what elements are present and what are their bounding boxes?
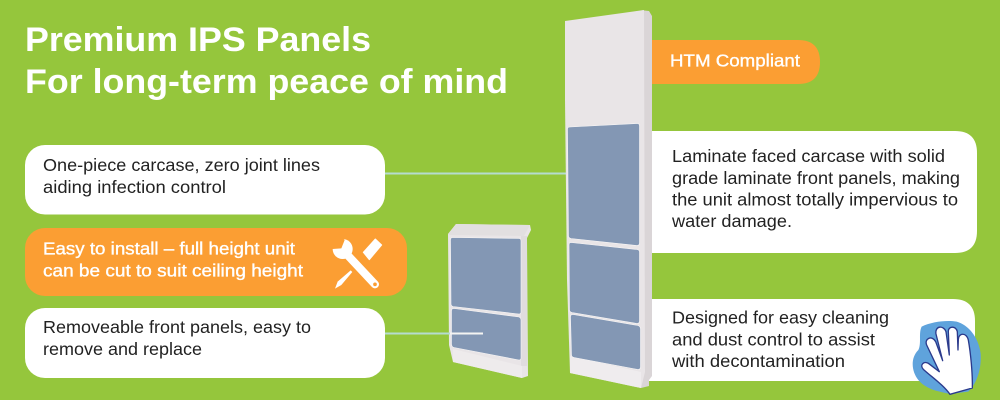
callout: easy to install: can be cut to suit ceiling height xyxy=(43,260,303,280)
title: Premium IPS Panels xyxy=(25,21,371,59)
callout: one-piece carcase: aiding infection control xyxy=(43,177,226,197)
title xyxy=(25,21,508,101)
callout: one-piece carcase: One-piece carcase, zero joint lines xyxy=(43,155,320,175)
callout: laminate faced carcase: the unit almost totally impervious to xyxy=(672,190,958,210)
callout: laminate faced carcase xyxy=(650,131,977,253)
callout: easy cleaning: and dust control to assist xyxy=(672,330,875,350)
callout: one-piece carcase xyxy=(25,145,385,214)
title: For long-term peace of mind xyxy=(25,63,508,101)
callout: removeable front panels: Removeable front panels, easy to xyxy=(43,317,311,337)
callout: HTM compliant xyxy=(650,40,820,84)
callout: easy to install: Easy to install – full height unit xyxy=(43,238,295,258)
icon: cleaning hand on blue cloth xyxy=(913,321,981,394)
callout: easy cleaning xyxy=(648,299,975,381)
callout: laminate faced carcase: Laminate faced carcase with solid xyxy=(672,146,945,166)
connector: carcase callout to tall unit xyxy=(385,172,566,174)
panel: small unit lower xyxy=(452,308,521,360)
callout: laminate faced carcase: grade laminate front panels, making xyxy=(672,168,960,188)
icon: wrench and screwdriver xyxy=(328,234,382,289)
panel: tall unit upper xyxy=(568,124,640,246)
product: small wall unit xyxy=(448,224,531,378)
connector: removeable panels callout to small unit xyxy=(385,332,483,334)
callout: laminate faced carcase: water damage. xyxy=(671,211,792,231)
product: tall full-height unit xyxy=(565,10,652,388)
panel: small unit upper xyxy=(450,238,521,314)
callout: easy to install xyxy=(25,228,407,296)
panel: tall unit middle xyxy=(569,242,640,324)
panel: tall unit lower xyxy=(570,314,640,370)
callout: HTM compliant: HTM Compliant xyxy=(670,50,800,70)
callout: easy cleaning: Designed for easy cleaning xyxy=(672,308,889,328)
callout: easy cleaning: with decontamination xyxy=(671,351,845,371)
callout: removeable front panels xyxy=(25,308,385,378)
callout: removeable front panels: remove and replace xyxy=(43,339,202,359)
